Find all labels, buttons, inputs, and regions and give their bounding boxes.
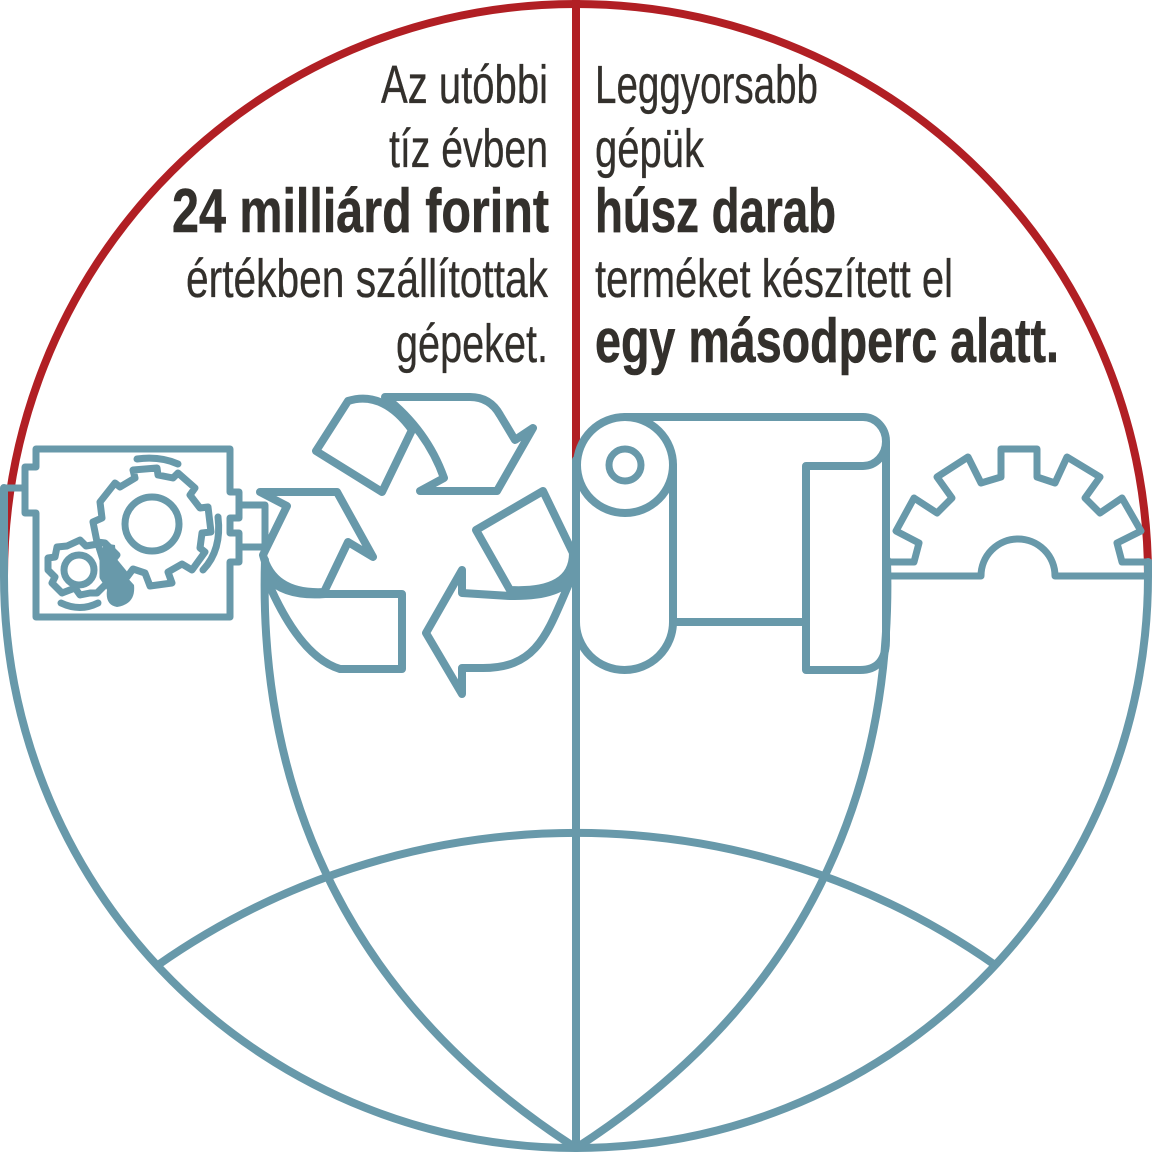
red upper arc and divider [4, 0, 1148, 576]
text: left column: gépeket. [396, 314, 548, 374]
text: left column: Az utóbbi [381, 55, 548, 115]
text: right column [595, 55, 1059, 376]
icon: half gear [889, 449, 1149, 576]
text: left column: 24 milliárd forint [172, 177, 549, 246]
text: left column: értékben szállítottak [186, 249, 549, 309]
text: left column: tíz évben [389, 119, 548, 179]
text: right column: húsz darab [595, 177, 836, 246]
text: right column: gépük [595, 119, 705, 179]
icon: recycling arrows [260, 397, 573, 694]
text: right column: Leggyorsabb [595, 55, 818, 115]
globe outline and meridians [4, 460, 1148, 1148]
icon: paper roll machine [576, 417, 886, 670]
text: right column: terméket készített el [595, 249, 953, 309]
icon: machine box with gears [4, 449, 265, 617]
text: left column [172, 55, 549, 374]
